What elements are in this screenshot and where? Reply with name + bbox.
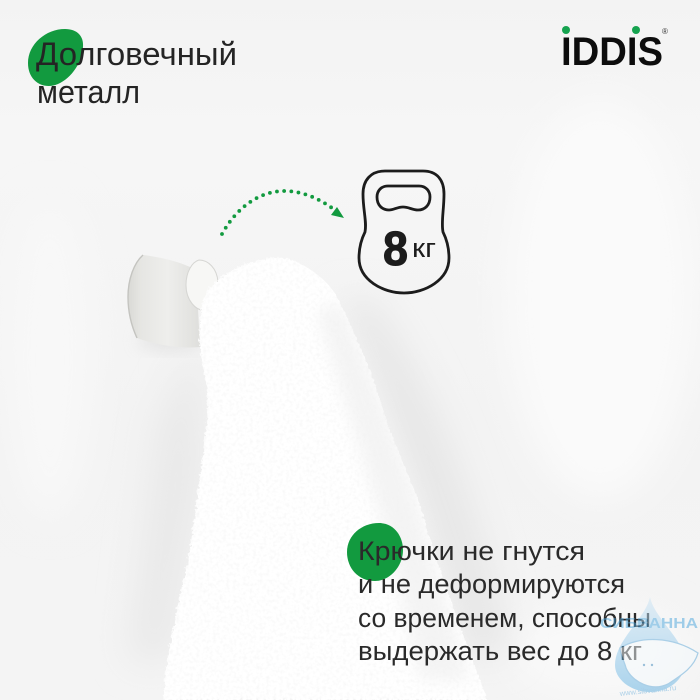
arrow: dotted curve to weight [222,191,344,234]
callout text: Крючки не гнутся [358,536,585,566]
watermark: Sibvanna: www.sibvanna.ru [618,683,677,698]
icon: kettlebell 8 kg: кг [412,233,436,263]
callout text: и не деформируются [358,569,625,599]
wall hook [128,255,218,350]
heading text: металл [37,74,140,110]
watermark: Sibvanna [600,597,698,698]
heading text [36,36,237,110]
heading text: Долговечный [36,36,237,72]
towel shadow on wall [147,318,500,644]
callout text: выдержать вес до 8 кг [358,636,642,666]
callout text [358,536,651,666]
callout: description [347,523,651,666]
watermark: Sibvanna: СИБВАННА [600,615,698,632]
background wall [548,150,652,450]
green blob: callout [347,523,403,581]
heading [28,29,237,110]
green blob: heading [28,29,83,86]
hook pin [186,260,218,310]
towel [163,258,487,700]
towel fold shading [328,315,459,674]
icon: kettlebell 8 kg: 8 [383,223,408,276]
icon: kettlebell 8 kg [359,171,449,293]
logo: IDDIS: ® [662,27,668,36]
callout text: со временем, способны [358,603,651,633]
logo: IDDIS: IDDIS [561,30,663,74]
